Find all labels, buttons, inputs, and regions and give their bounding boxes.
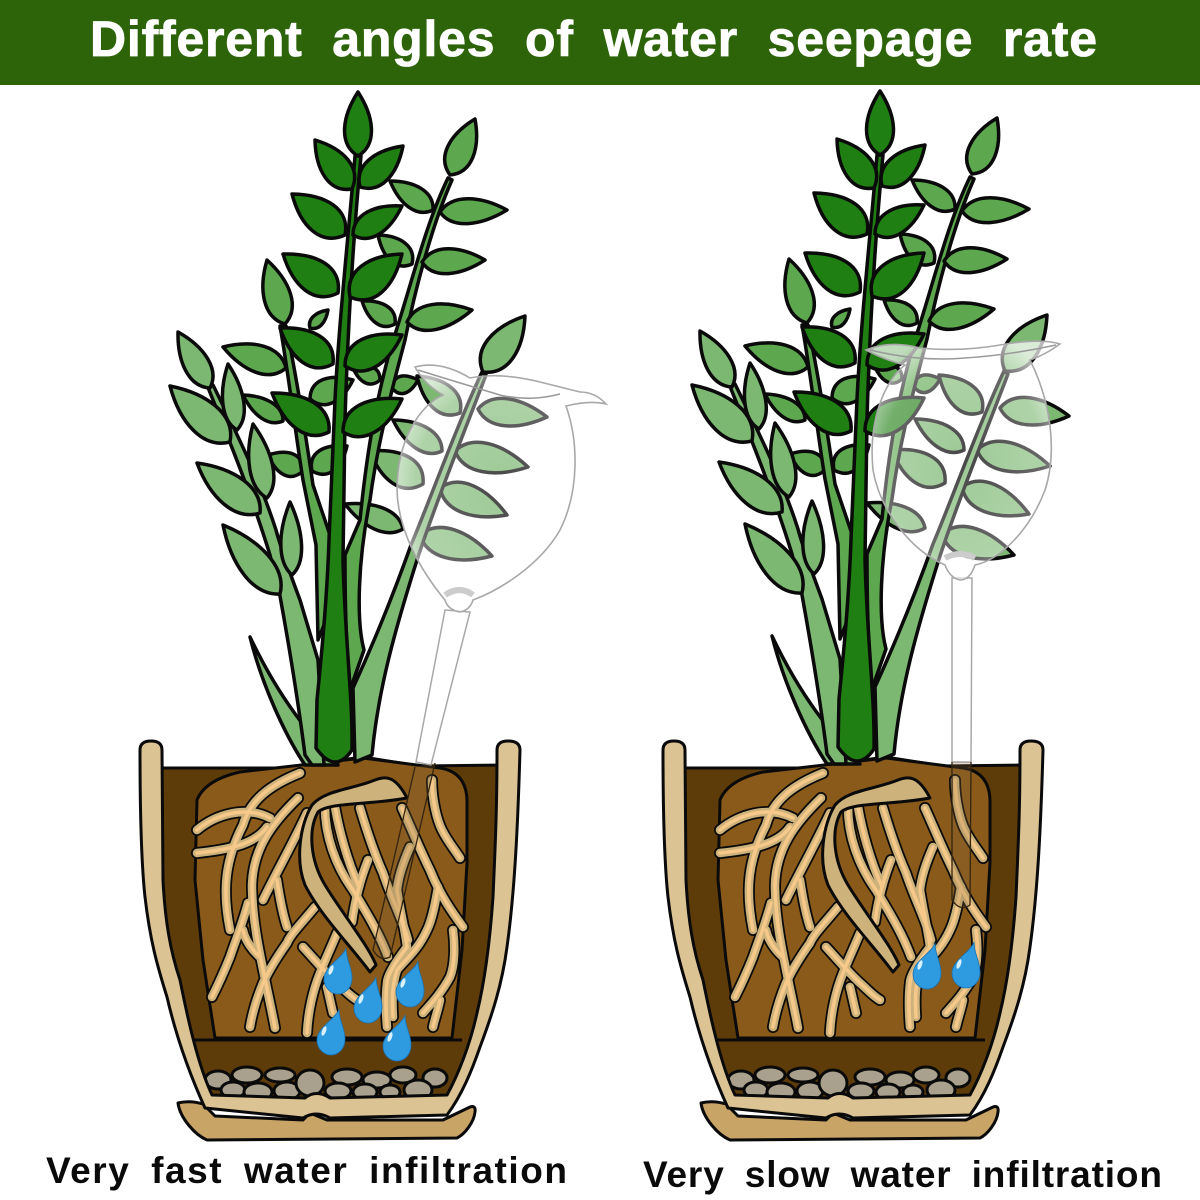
roots [720,773,986,1033]
drop highlights [320,965,407,1042]
panel: right plant slow infiltration [663,91,1071,1140]
drop highlights [916,959,963,970]
glass watering bulb upright [866,341,1060,908]
pot with soil and pebbles [140,741,520,1140]
plant foliage [159,92,549,765]
plant foliage [681,91,1071,764]
pot with soil and pebbles [663,741,1043,1140]
title: Different angles of water seepage rate [90,11,1097,67]
glass watering bulb tilted [373,365,606,958]
roots [197,773,463,1033]
water drops [913,942,980,989]
caption: right: Very slow water infiltration [643,1154,1162,1195]
caption: left: Very fast water infiltration [46,1150,567,1191]
water drops [317,948,424,1061]
panel: left plant fast infiltration [140,92,606,1140]
title banner [0,0,1200,85]
